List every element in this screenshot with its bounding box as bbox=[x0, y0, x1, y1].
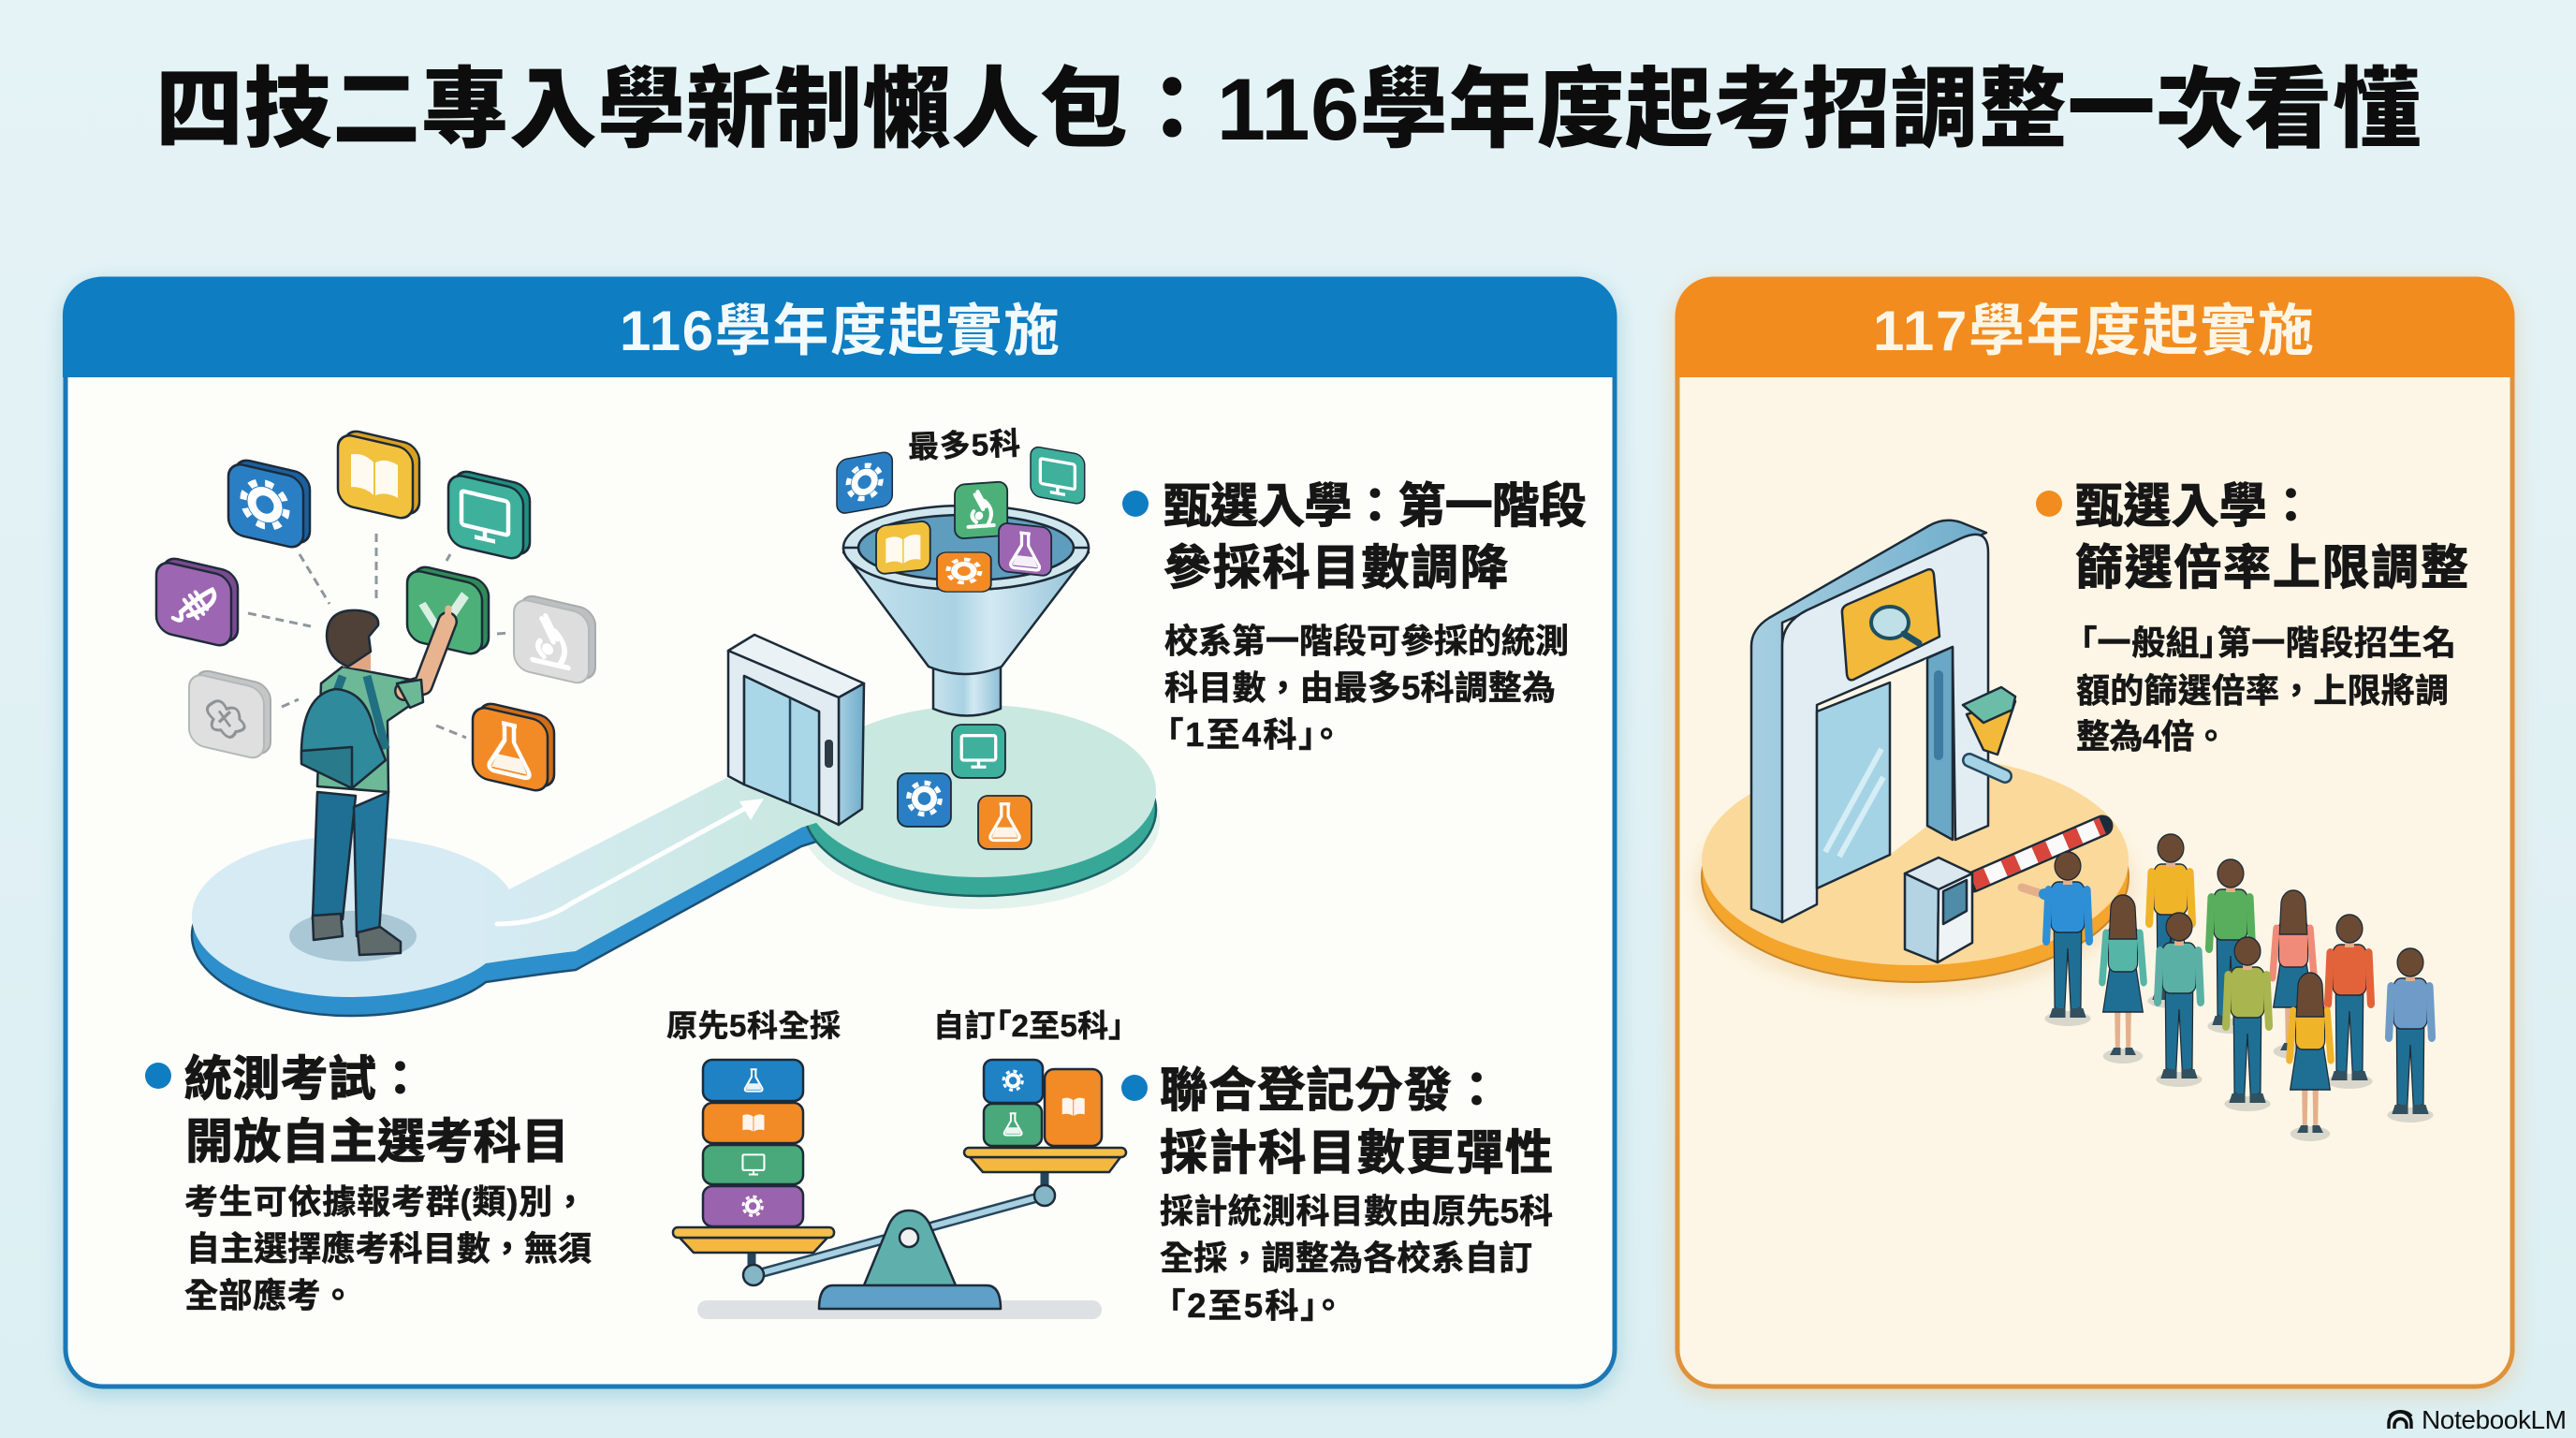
heading line 2: 篩選倍率上限調整 bbox=[2075, 541, 2468, 594]
left pan bbox=[680, 1238, 827, 1253]
icon: green check tile bbox=[407, 563, 489, 658]
icon: yellow book tile bbox=[338, 427, 419, 522]
icon: grey microscope tile bbox=[514, 592, 595, 687]
body: allocation: 採計統測科目數由原先5科 bbox=[1160, 1192, 1553, 1230]
body: allocation: 「2至5科」。 bbox=[1168, 1286, 1337, 1325]
arrow on path bbox=[497, 799, 764, 924]
title: 四技二專入學新制懶人包：116學年度起考招調整一次看懂 bbox=[155, 60, 2421, 158]
person: yellow shirt bbox=[2147, 834, 2194, 1008]
body: screening ratio: 額的篩選倍率，上限將調 bbox=[2076, 671, 2449, 710]
body: screening bbox=[1164, 622, 1569, 754]
block: screening ratio bbox=[2036, 479, 2468, 756]
icon: grey blob tile bbox=[189, 667, 271, 762]
body: screening: 「1至4科」。 bbox=[1166, 715, 1335, 754]
heading line 2: 參採科目數調降 bbox=[1164, 541, 1508, 594]
panel: 116 academic year bbox=[62, 277, 1619, 1397]
right stack: 2 to 5 subjects bbox=[984, 1060, 1102, 1146]
header text: 117: 117學年度起實施 bbox=[1873, 300, 2314, 362]
person: teal woman bbox=[2102, 895, 2144, 1064]
person: red shirt bbox=[2326, 915, 2373, 1089]
icon: funnel flask tile bbox=[999, 522, 1051, 577]
icon: funnel orange gear tile bbox=[937, 552, 991, 592]
balance scale bbox=[673, 1060, 1126, 1319]
body: exam: 全部應考。 bbox=[184, 1276, 355, 1314]
block: exam bbox=[145, 1052, 592, 1314]
icon: funnel microscope tile bbox=[955, 481, 1007, 539]
small funnel bbox=[1963, 687, 2015, 776]
scale labels bbox=[666, 1008, 1124, 1043]
elevator gate bbox=[728, 635, 864, 825]
icon: orange flask tile bbox=[473, 699, 554, 795]
panel header: 117 bbox=[1676, 277, 2514, 377]
icon: floating monitor tile bbox=[1031, 446, 1085, 505]
icon: output gear tile bbox=[898, 773, 951, 827]
body: exam: 自主選擇應考科目數，無須 bbox=[186, 1229, 592, 1268]
scale ground bbox=[697, 1300, 1102, 1319]
body: screening ratio: 整為4倍。 bbox=[2076, 717, 2228, 756]
scale labels: 自訂「2至5科」 bbox=[933, 1008, 1124, 1043]
scale labels: 原先5科全採 bbox=[666, 1008, 841, 1043]
icon: funnel book tile bbox=[876, 521, 930, 575]
block: screening bbox=[1122, 479, 1587, 754]
body: screening: 校系第一階段可參採的統測 bbox=[1164, 622, 1569, 660]
icon: floating gear tile bbox=[837, 451, 892, 515]
body: screening ratio bbox=[2076, 624, 2456, 756]
person: pink woman bbox=[2273, 890, 2314, 1059]
heading line 2: 開放自主選考科目 bbox=[185, 1115, 569, 1168]
header text: 116: 116學年度起實施 bbox=[620, 300, 1060, 362]
person: yellow woman bbox=[2290, 973, 2331, 1141]
screening gate bbox=[1751, 521, 2015, 922]
icon: blue gear tile bbox=[228, 456, 310, 551]
right pan bbox=[970, 1157, 1120, 1172]
body: exam bbox=[184, 1182, 592, 1314]
heading: exam: 統測考試： bbox=[184, 1052, 424, 1106]
panel header: 116 bbox=[63, 277, 1617, 377]
queue of applicants bbox=[2022, 834, 2434, 1141]
heading: screening ratio: 甄選入學： bbox=[2075, 479, 2315, 533]
barrier gate bbox=[1905, 826, 2102, 962]
student figure bbox=[301, 609, 448, 955]
NotebookLM logo: NotebookLM bbox=[2422, 1405, 2567, 1434]
bullet bbox=[1121, 1075, 1148, 1101]
icon: purple dna tile bbox=[156, 554, 238, 650]
person: olive shirt bbox=[2224, 937, 2271, 1111]
sign: magnifier bbox=[1842, 569, 1939, 680]
body: exam: 考生可依據報考群(類)別， bbox=[184, 1182, 587, 1221]
icon: teal monitor tile bbox=[448, 467, 530, 563]
heading line 2: 採計科目數更彈性 bbox=[1160, 1126, 1553, 1180]
panel: 117 academic year bbox=[1672, 277, 2518, 1397]
label: max 5 subjects: 最多5科 bbox=[907, 426, 1021, 464]
heading: screening: 甄選入學：第一階段 bbox=[1164, 479, 1587, 533]
bullet bbox=[2036, 491, 2062, 517]
person: blue shirt at barrier bbox=[2022, 852, 2091, 1026]
body: screening ratio: 「一般組」第一階段招生名 bbox=[2080, 624, 2456, 662]
person shadow bbox=[289, 911, 417, 961]
panel body bbox=[1677, 279, 2512, 1387]
icon: output monitor tile bbox=[952, 725, 1005, 778]
platform path bbox=[192, 705, 1160, 1016]
left stack: 5 subjects bbox=[703, 1060, 803, 1226]
person: green shirt bbox=[2207, 859, 2254, 1034]
body: allocation bbox=[1160, 1192, 1553, 1325]
block: allocation bbox=[1121, 1064, 1553, 1325]
heading: allocation: 聯合登記分發： bbox=[1160, 1064, 1500, 1117]
body: screening: 科目數，由最多5科調整為 bbox=[1164, 668, 1556, 707]
bullet bbox=[145, 1063, 171, 1089]
orange platform bbox=[1694, 756, 2136, 995]
funnel bbox=[843, 481, 1089, 715]
bullet bbox=[1122, 491, 1149, 517]
icon: output flask tile bbox=[978, 796, 1032, 849]
panel body bbox=[66, 279, 1615, 1387]
person: blue-grey shirt bbox=[2387, 948, 2434, 1123]
body: allocation: 全採，調整為各校系自訂 bbox=[1160, 1239, 1532, 1277]
person: teal man bbox=[2156, 913, 2203, 1087]
dashed connector lines bbox=[248, 534, 509, 738]
